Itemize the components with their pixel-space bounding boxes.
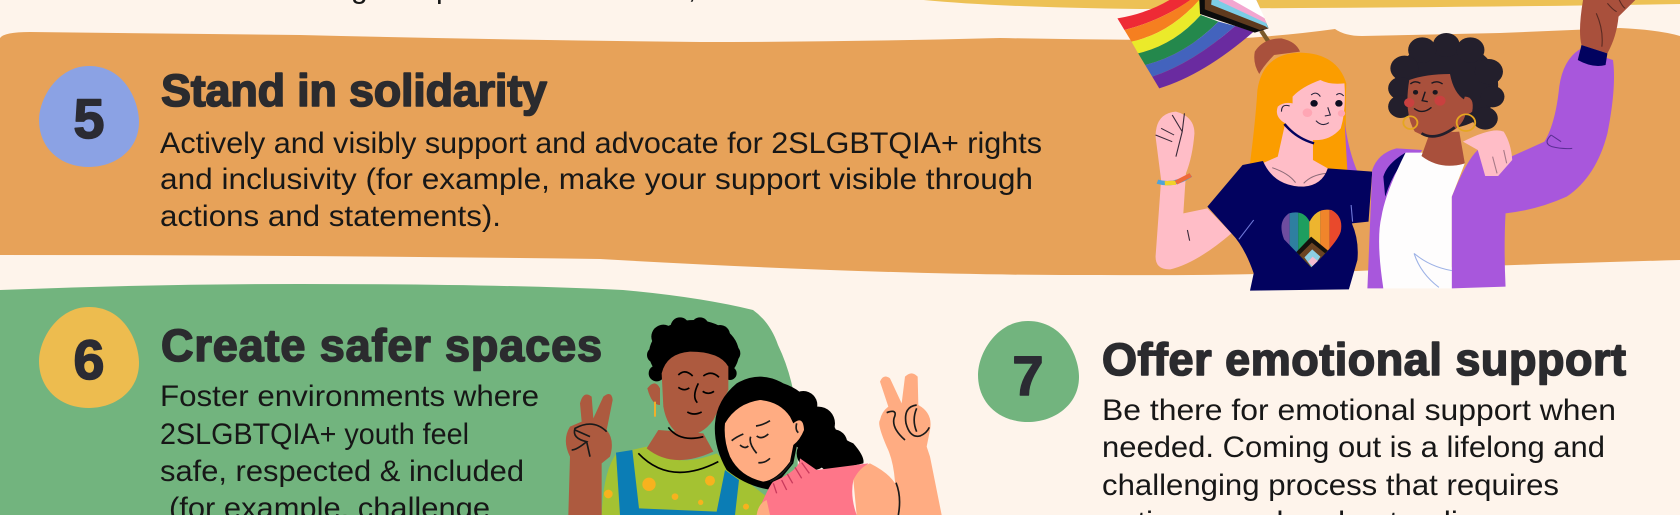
heading 6: Create safer spaces bbox=[161, 320, 602, 371]
body 5: actions and statements). bbox=[160, 200, 501, 233]
hand holding flag bbox=[1254, 38, 1300, 74]
badge 6 bbox=[39, 307, 139, 408]
body 7: Be there for emotional support when bbox=[1102, 394, 1616, 427]
step 6 bbox=[39, 307, 602, 515]
body 6: safe, respected & included bbox=[160, 455, 524, 488]
woman with orange hair bbox=[1156, 53, 1372, 291]
woman with dark curly hair bbox=[1367, 0, 1637, 288]
body 7 bbox=[1102, 394, 1616, 515]
body 7: needed. Coming out is a lifelong and bbox=[1102, 431, 1605, 464]
step 5 bbox=[39, 65, 1042, 233]
badge 6: 6 bbox=[73, 328, 105, 391]
body 5 bbox=[160, 127, 1042, 233]
badge 7 bbox=[978, 321, 1079, 422]
panel: orange band bbox=[0, 28, 1680, 275]
body 6 bbox=[160, 380, 539, 515]
step 7 bbox=[978, 321, 1626, 515]
panel: green block bbox=[0, 284, 800, 515]
peace-sign hand bbox=[879, 373, 942, 515]
icon: progress pride flag bbox=[1117, 0, 1270, 88]
woman with long curly hair bbox=[715, 377, 901, 515]
badge 5 bbox=[39, 66, 139, 167]
heading 5: Stand in solidarity bbox=[161, 65, 547, 116]
badge 7: 7 bbox=[1012, 344, 1044, 407]
body 5: and inclusivity (for example, make your support visible through bbox=[160, 163, 1033, 196]
icon: rainbow heart bbox=[1282, 210, 1342, 268]
heading 7: Offer emotional support bbox=[1102, 334, 1626, 385]
body 6: 2SLGBTQIA+ youth feel bbox=[160, 418, 469, 451]
illustration: two friends making peace signs bbox=[566, 317, 942, 515]
panel: yellow band top edge bbox=[905, 0, 1680, 9]
badge 5: 5 bbox=[73, 87, 105, 150]
body 7: challenging process that requires bbox=[1102, 469, 1559, 502]
illustration: two friends with pride flag bbox=[1117, 0, 1637, 291]
man with short curly hair bbox=[566, 317, 767, 515]
body 5: Actively and visibly support and advocate for 2SLGBTQIA+ rights bbox=[160, 127, 1042, 160]
cropped text from previous section bbox=[351, 0, 696, 5]
body 6: Foster environments where bbox=[160, 380, 539, 413]
